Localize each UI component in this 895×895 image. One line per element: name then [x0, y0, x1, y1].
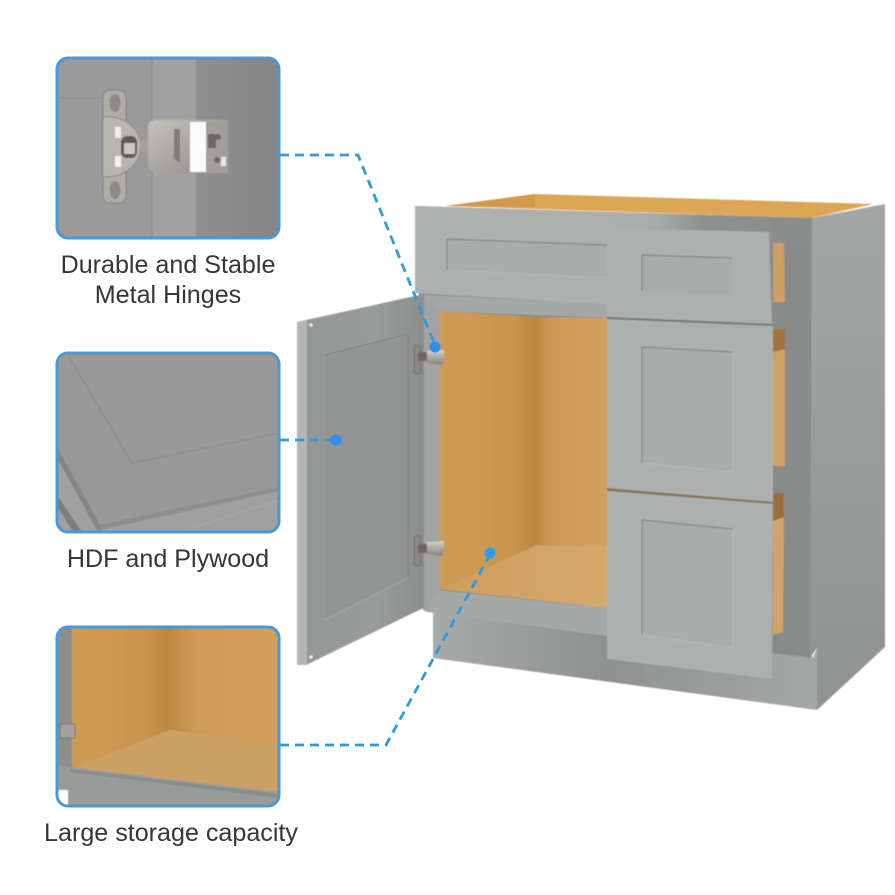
heading: storage label: Large storage capacity — [44, 819, 298, 847]
panel: metal hinges — [57, 58, 279, 238]
callout: storage leader — [280, 548, 496, 745]
callout: hinge leader — [280, 155, 440, 352]
top false drawer front — [415, 206, 607, 304]
heading: hinges label: Metal Hinges — [95, 281, 241, 309]
cabinet side panel — [810, 204, 885, 710]
cabinet illustration — [297, 194, 885, 710]
drawer front: top right — [607, 228, 772, 324]
upper right rail — [607, 212, 812, 245]
drawer box: top — [773, 243, 785, 302]
heading: hinges label: Durable and Stable — [61, 251, 275, 279]
drawer front: bottom — [607, 491, 773, 679]
icon: hinge close-up — [103, 90, 228, 203]
upper recess rail — [423, 295, 607, 318]
left stile — [423, 296, 440, 612]
callout: HDF leader — [280, 434, 342, 446]
interior — [440, 311, 607, 608]
drawer front: middle — [607, 319, 773, 502]
heading: HDF label: HDF and Plywood — [67, 545, 269, 573]
panel: storage capacity — [57, 627, 279, 806]
cabinet top interior — [445, 194, 873, 218]
toe kick — [433, 612, 817, 710]
panel: HDF and plywood — [57, 353, 279, 532]
drawer box: middle — [773, 329, 785, 466]
drawer box: bottom — [773, 493, 784, 635]
open door — [297, 294, 424, 665]
cabinet back frame — [415, 206, 812, 660]
lower door hinge — [414, 536, 444, 566]
bottom rail — [427, 588, 607, 636]
upper door hinge — [414, 345, 444, 374]
